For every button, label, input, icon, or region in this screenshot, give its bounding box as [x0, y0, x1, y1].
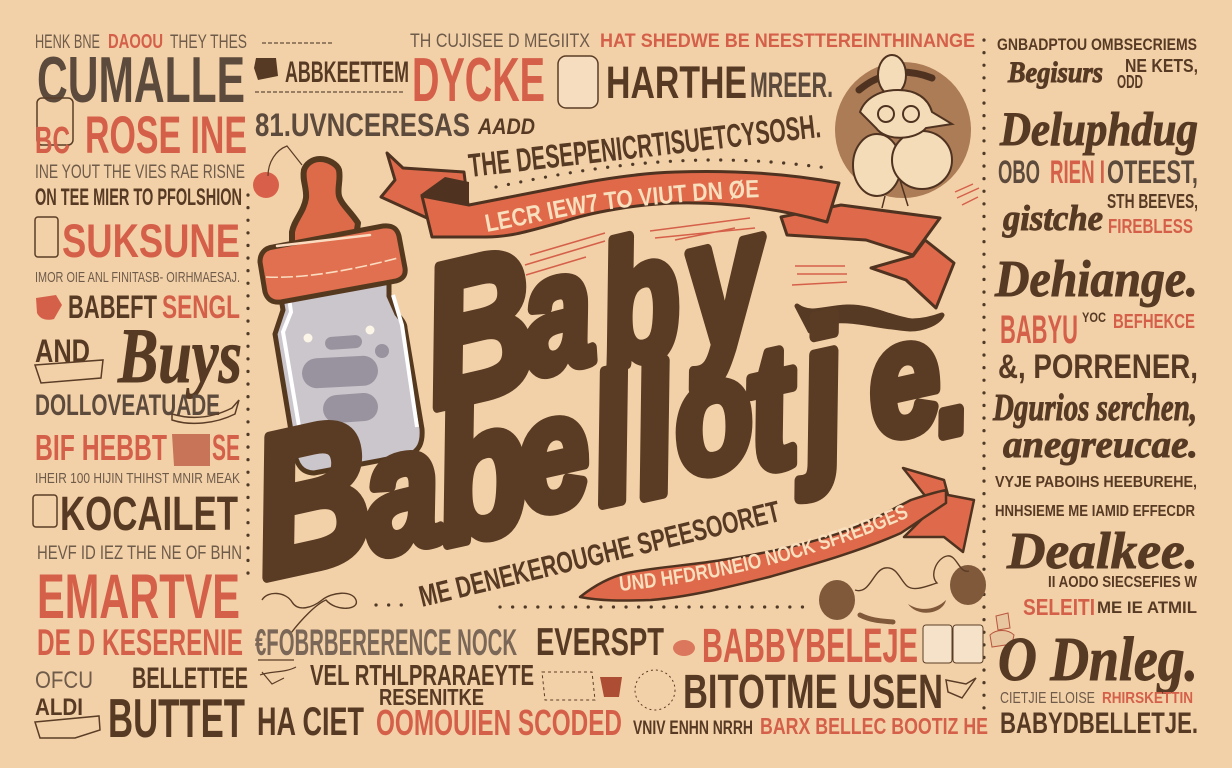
text line: IHEIR 100 HIJIN THIHST MNIR MEAK [35, 470, 240, 487]
heading: Bitotme Usen: BITOTME USEN [683, 666, 943, 719]
title: Babellotje: j [769, 280, 860, 502]
text: header line: DAOOU [108, 31, 163, 53]
text line: TH CUJISEE D MEGIITX [410, 31, 590, 52]
heading script: anegreucae. [1003, 424, 1198, 466]
title: Babellotje: B [239, 376, 384, 620]
text: Begisurs [1007, 56, 1103, 89]
heading: Babeft Sengl: BABEFT [68, 289, 157, 325]
heading: De D Keserenie: DE D KESERENIE [37, 622, 243, 663]
heading script: Deluphdug [999, 103, 1198, 156]
text [998, 154, 1198, 190]
panel: top band [254, 31, 979, 208]
text: BARX BELLEC BOOTIZ HE [760, 713, 988, 739]
heading: numeric line: AADD [477, 114, 535, 139]
title: Babellotje: l [619, 328, 690, 536]
heading: Cumalle: CUMALLE [37, 43, 245, 116]
doodle: red hatch marks [525, 218, 847, 285]
heading: Babeft Sengl: SENGL [162, 289, 240, 325]
heading: Abbkeettem Dycke: DYCKE [412, 46, 545, 115]
text: RESENITKE [379, 684, 484, 710]
icon: jar [558, 56, 598, 108]
heading script: Dealkee. [1006, 523, 1198, 580]
text line red: HAT SHEDWE BE NEESTTEREINTHINANGE [600, 31, 975, 52]
icons: pacifier doodles [819, 556, 986, 622]
text: header line: HENK BNE [35, 32, 100, 53]
icon: small cup [673, 640, 695, 656]
doodle: dashed cup [542, 670, 675, 710]
icon: cake [990, 613, 1014, 647]
text: RHIRSKETTIN [1102, 690, 1193, 707]
text line with icon: DOLLOVEATUADE [35, 389, 220, 422]
text: EVERSPT [536, 621, 664, 664]
heading: Harthe Mreer: MREER. [750, 66, 833, 105]
text: HA CIET [257, 700, 364, 744]
heading: Rose Ine: ROSE INE [85, 106, 247, 165]
icon: character medallion [835, 55, 971, 208]
heading: Kocailet [33, 488, 238, 541]
text: CIETJIE ELOISE [1000, 690, 1095, 707]
text: VNIV ENHN NRRH [633, 718, 753, 739]
title: Babellotje: e [856, 282, 951, 474]
ribbon: lower [578, 466, 976, 602]
icon: cherry [253, 146, 302, 198]
text: OBO [998, 154, 1040, 190]
title: Babellotje: . [921, 295, 977, 468]
text: OOMOUIEN SCODED [376, 702, 622, 743]
text: €FOBRBERERENCE NOCK [255, 622, 517, 663]
panel: left column [33, 31, 248, 749]
text [633, 713, 988, 739]
text: header line: THEY THES [170, 32, 247, 53]
heading: Kocailet: KOCAILET [60, 488, 238, 541]
heading: Harthe Mreer: HARTHE [606, 57, 747, 108]
text: RIEN I [1050, 154, 1105, 190]
heading: numeric line: 81.UVNCERESAS [255, 107, 470, 143]
title: Babellotje: o [662, 319, 763, 512]
ribbon: top [380, 152, 956, 310]
text [1023, 594, 1197, 620]
title: Baby: b [588, 197, 691, 405]
text: VYJE PABOIHS HEEBUREHE, [995, 474, 1197, 491]
heading: Abbkeettem Dycke: ABBKEETTEM [285, 56, 409, 89]
heading: Babbybeleje: BABBYBELEJE [702, 620, 918, 673]
decorative flourish [797, 306, 942, 331]
doodle: squiggle loops [262, 593, 356, 633]
text: HNHSIEME ME IAMID EFFECDR [995, 503, 1195, 520]
heading: Aldi Buttet: ALDI [35, 694, 83, 721]
title: Babellotje: b [422, 361, 539, 584]
title: Baby: a [511, 213, 603, 411]
heading: Suksune with jar icon [35, 214, 240, 267]
icon: cross hatch [955, 184, 979, 205]
heading: Emartve: EMARTVE [37, 562, 240, 632]
heading: Rose Ine [35, 98, 247, 165]
panel: bottom band [255, 593, 988, 744]
heading: And Buys: AND [35, 333, 90, 369]
heading: Bif Hebbt: BIF HEBBT [35, 427, 167, 468]
text: FIREBLESS [1108, 216, 1193, 238]
title: Babellotje: a [351, 388, 452, 592]
text [1000, 690, 1193, 707]
title: Baby: B [411, 206, 547, 450]
text: ME IE ATMIL [1097, 598, 1197, 617]
text: VEL RTHLPRARAEYTE [310, 660, 534, 692]
text [1007, 56, 1198, 92]
text: YOC [1082, 309, 1106, 325]
heading: Babeft Sengl [36, 289, 240, 325]
heading: Suksune with jar icon: SUKSUNE [62, 214, 240, 267]
text: Ofcu Bellettee [35, 662, 248, 695]
doodle: hand [258, 660, 296, 684]
heading: Aldi Buttet: BUTTET [108, 687, 245, 749]
heading script: O Dnleg. [998, 626, 1198, 694]
text: BABYU [1000, 308, 1078, 352]
text: SELEITI [1023, 594, 1095, 620]
title: Babellotje: t [733, 305, 812, 509]
text: ODD [1117, 72, 1143, 92]
title: Baby: y [666, 168, 781, 392]
icon: boxes [923, 625, 983, 663]
text line: HEVF ID IEZ THE NE OF BHN [37, 543, 242, 564]
text line: INE YOUT THE VIES RAE RISNE [35, 162, 245, 183]
text line: ON TEE MIER TO PFOLSHION [35, 184, 242, 211]
icon: baby bottle [260, 159, 422, 473]
ribbon text: UND HFDRUNEIO NOCK SFREBGES [620, 505, 908, 591]
heading: And Buys [35, 312, 242, 399]
text: header line [35, 31, 247, 53]
heading: Bif Hebbt: SE [212, 427, 240, 468]
text: gistche [1002, 198, 1103, 238]
doodles: squiggle lines [255, 43, 405, 92]
text line: IMOR OIE ANL FINITASB- OIRHMAESAJ. [35, 269, 240, 286]
heading: Abbkeettem Dycke [254, 46, 545, 115]
heading: Aldi Buttet [35, 687, 245, 749]
subtitle: lower angled: ME DENEKEROUGHE SPEESOORET [416, 495, 783, 614]
heading script: Dehiange. [994, 251, 1198, 308]
heading: And Buys: Buys [117, 312, 242, 399]
text: BEFHEKCE [1113, 311, 1195, 333]
text [1002, 191, 1198, 238]
ribbon text: LECR IEW7 TO VIUT DN ØE [485, 180, 759, 232]
text: Ofcu Bellettee: OFCU [35, 667, 93, 694]
title: Babellotje: l [577, 335, 648, 543]
panel: right column [990, 35, 1198, 740]
subtitle: angled: THE DESEPENICRTISUETCYSOSH. [467, 107, 823, 184]
title: Babellotje: e [505, 357, 600, 549]
text: II AODO SIECSEFIES W [1048, 574, 1198, 591]
text: NE KETS, [1125, 56, 1198, 76]
heading: Rose Ine: BC [35, 120, 70, 162]
icon: pouch [946, 678, 976, 698]
text: Ofcu Bellettee: BELLETTEE [132, 662, 248, 695]
